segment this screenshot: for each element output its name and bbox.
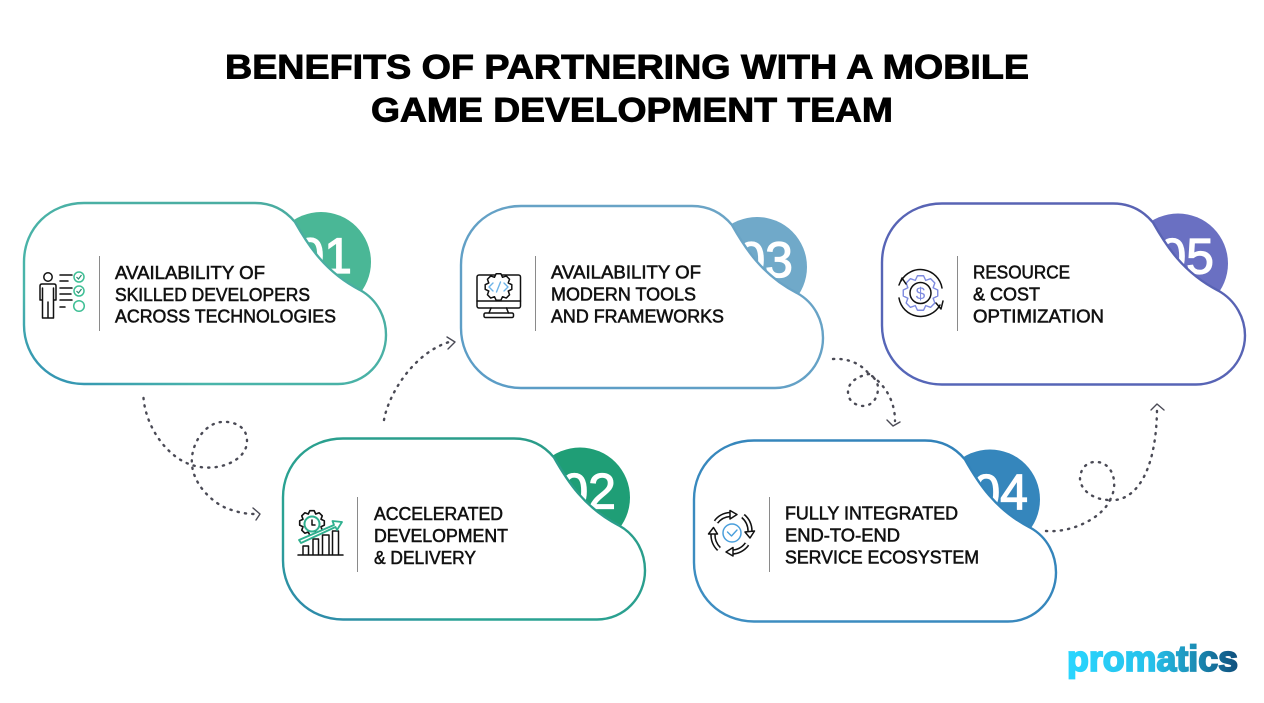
panel: 03 modern tools (461, 206, 823, 388)
arrow: step 2 to step 3 (384, 337, 455, 420)
card outline (882, 204, 1245, 384)
badge: 04 (940, 450, 1040, 550)
title: GAME DEVELOPMENT TEAM (371, 92, 893, 130)
arrow: step 4 to step 5 (1046, 404, 1164, 531)
icon: dollar gear with cycle arrows: $ (916, 284, 926, 303)
badge: 02: 02 (560, 464, 616, 520)
text: step 1: ACROSS TECHNOLOGIES (115, 306, 336, 326)
text: step 4: FULLY INTEGRATED (785, 504, 958, 524)
text: step 1: SKILLED DEVELOPERS (115, 285, 310, 305)
text: step 3 (551, 262, 724, 326)
text: step 5 (973, 262, 1104, 326)
divider (356, 497, 358, 572)
divider (534, 256, 536, 331)
panel: 04 integrated ecosystem (694, 440, 1056, 622)
text: step 5: & COST (973, 284, 1040, 304)
text: step 3: MODERN TOOLS (551, 284, 696, 304)
text: step 2 (374, 504, 508, 568)
badge: 01: 01 (296, 228, 352, 284)
arrow: step 3 to step 4 (833, 359, 900, 426)
text: step 3: AND FRAMEWORKS (551, 306, 724, 326)
text: step 3: AVAILABILITY OF (551, 262, 701, 282)
title (225, 48, 1029, 130)
icon: person with checklist (40, 272, 84, 318)
text: step 4: END-TO-END (785, 526, 900, 546)
badge: 03: 03 (737, 232, 793, 288)
text: step 2: ACCELERATED (374, 504, 503, 524)
badge: 05 (1128, 214, 1228, 314)
icon: gear clock and growth chart (298, 511, 343, 555)
text: step 4 (785, 504, 979, 568)
card outline (461, 206, 823, 388)
icon: dollar gear with cycle arrows (899, 270, 943, 316)
text: step 5: RESOURCE (973, 262, 1070, 282)
panel: 01 skilled developers (24, 203, 386, 384)
badge: 01 (271, 212, 371, 312)
text: step 4: SERVICE ECOSYSTEM (785, 548, 979, 568)
badge: 04: 04 (972, 464, 1028, 520)
text: step 1 (115, 263, 336, 326)
text: step 5: OPTIMIZATION (973, 306, 1104, 326)
text: step 2: DEVELOPMENT (374, 526, 508, 546)
badge: 02 (530, 448, 630, 548)
icon: cycle with check (708, 510, 754, 556)
panel: 05 resource and cost optimization (882, 204, 1245, 384)
text: step 1: AVAILABILITY OF (115, 263, 265, 283)
divider (768, 497, 770, 572)
badge: 03 (707, 217, 807, 317)
card outline (694, 440, 1056, 622)
panel: 02 accelerated delivery (283, 438, 645, 620)
card outline (283, 438, 645, 620)
title: BENEFITS OF PARTNERING WITH A MOBILE (225, 48, 1029, 86)
divider (98, 256, 100, 331)
badge: 05: 05 (1158, 228, 1214, 284)
divider (956, 256, 958, 331)
logo: promatics: promatics (1067, 638, 1238, 679)
icon: monitor with code gear (477, 274, 520, 318)
text: step 2: & DELIVERY (374, 548, 476, 568)
arrow: step 1 to step 2 (144, 398, 260, 520)
card outline (24, 203, 386, 384)
